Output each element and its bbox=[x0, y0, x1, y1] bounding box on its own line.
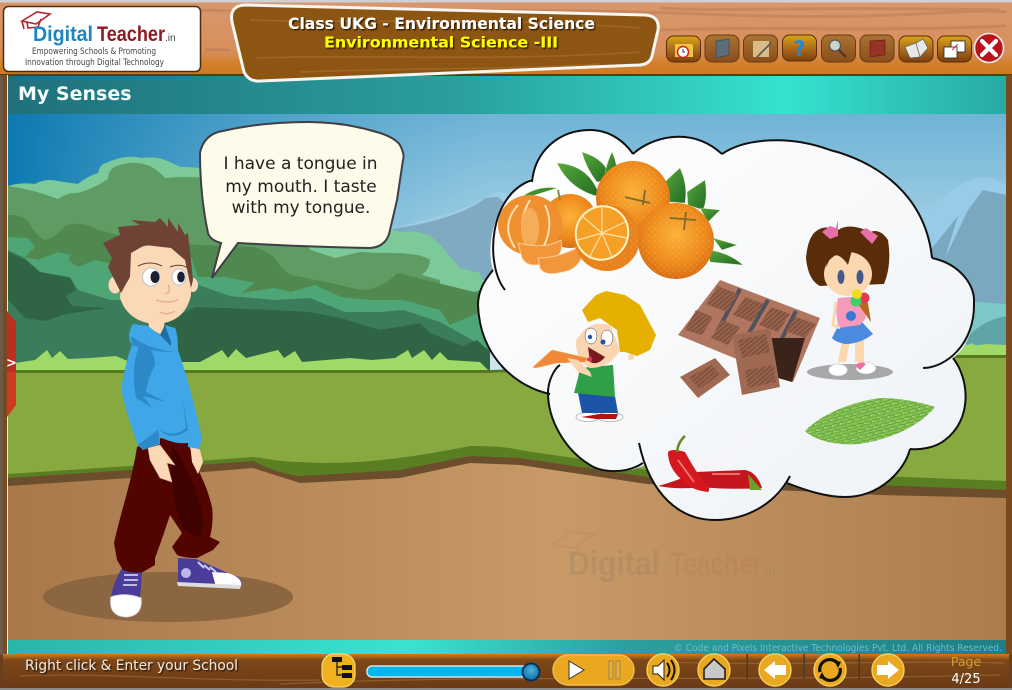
play and pause pill bbox=[553, 655, 634, 685]
legs bbox=[838, 340, 864, 362]
grass tufts left bbox=[8, 349, 490, 372]
icon: help bbox=[782, 35, 816, 61]
dark bush left bbox=[8, 252, 108, 321]
icon: help: ? bbox=[793, 37, 806, 61]
eyes and mouth bbox=[585, 328, 613, 363]
piece: small bbox=[680, 358, 730, 398]
icon: close bbox=[974, 34, 1004, 62]
hair bbox=[582, 291, 656, 356]
eyes bbox=[838, 270, 864, 284]
green field bbox=[8, 358, 1006, 490]
logo panel bbox=[4, 6, 200, 72]
side tab arrow: > bbox=[6, 356, 17, 371]
icon: open book bbox=[899, 36, 933, 62]
shadow bbox=[43, 572, 293, 622]
back shoe bbox=[177, 558, 241, 589]
nose and mouth bbox=[156, 285, 178, 314]
divider bbox=[858, 654, 860, 679]
progress slider bbox=[367, 664, 540, 680]
ice cream bbox=[850, 289, 871, 322]
boy eating pizza bbox=[533, 291, 656, 422]
cloud fill bbox=[478, 130, 974, 520]
broken dark edge bbox=[770, 338, 805, 382]
bottom control bar bbox=[0, 654, 1012, 690]
icon: search bbox=[822, 35, 856, 62]
oranges bbox=[498, 152, 743, 279]
button: replay bbox=[814, 654, 846, 686]
icon: dictionary bbox=[860, 35, 894, 62]
logo wordmark second part: Teacher bbox=[97, 23, 165, 46]
watermark: Teacher bbox=[670, 546, 762, 582]
school text: Right click & Enter your School bbox=[25, 658, 238, 674]
hair bbox=[103, 218, 193, 293]
orange: top bbox=[596, 161, 670, 235]
shirt bbox=[836, 296, 866, 328]
face bbox=[576, 324, 620, 368]
chilli: upright bbox=[668, 450, 709, 492]
grass strip right bbox=[955, 343, 1006, 356]
orange: peeled mandarin bbox=[498, 195, 562, 255]
orange: halved bbox=[565, 195, 640, 271]
arms bbox=[833, 302, 840, 328]
divider bbox=[746, 654, 748, 679]
dirt ground bbox=[8, 463, 1006, 641]
hoodie shading bbox=[131, 336, 188, 450]
page label: Page bbox=[951, 654, 981, 669]
back canopy bbox=[8, 163, 490, 372]
grass edge bbox=[8, 355, 1006, 373]
logo tagline 1: Empowering Schools & Promoting bbox=[32, 47, 156, 57]
hair back bbox=[806, 226, 889, 286]
trousers bbox=[114, 438, 220, 573]
illustrated scene bbox=[8, 114, 1006, 641]
page number: 4/25 bbox=[951, 672, 981, 687]
arm bbox=[567, 358, 592, 377]
toolbar icons bbox=[666, 34, 1004, 62]
red chillies bbox=[658, 436, 762, 492]
title line 2: Environmental Science -III bbox=[324, 34, 558, 52]
shadow bbox=[807, 364, 893, 380]
dark bush right bbox=[150, 307, 490, 372]
main slab bbox=[678, 280, 820, 382]
distant mountains bbox=[392, 177, 1006, 346]
orange: front bbox=[638, 203, 714, 279]
head bbox=[103, 218, 198, 324]
teal footer band bbox=[8, 640, 1006, 655]
bubble text line 3: with my tongue. bbox=[232, 198, 370, 218]
title line 1: Class UKG - Environmental Science bbox=[288, 14, 595, 33]
button: forward bbox=[872, 654, 904, 686]
face bbox=[824, 252, 872, 296]
shirt bbox=[574, 365, 615, 397]
icon: notepad bbox=[744, 35, 778, 62]
pizza bbox=[533, 350, 587, 368]
side tab bbox=[6, 311, 17, 417]
girl with ice cream bbox=[806, 220, 893, 380]
teal heading band bbox=[8, 76, 1006, 114]
hoodie bbox=[121, 324, 202, 450]
button: sound bbox=[647, 654, 679, 686]
chocolate bar bbox=[678, 280, 820, 398]
logo tagline 2: Innovation through Digital Technology bbox=[25, 58, 165, 68]
piece: stacked bbox=[732, 328, 780, 395]
logo: graduation cap bbox=[22, 12, 50, 29]
hands bbox=[148, 443, 203, 482]
logo suffix: .in bbox=[165, 33, 176, 44]
front shoe bbox=[110, 568, 142, 617]
jeans bbox=[578, 393, 618, 413]
slab grooves bbox=[718, 289, 796, 352]
orange: back mandarin bbox=[543, 194, 597, 248]
bubble text line 1: I have a tongue in bbox=[223, 154, 378, 174]
heading: My Senses: My Senses bbox=[18, 83, 132, 105]
watermark: .in bbox=[762, 564, 776, 579]
divider bbox=[804, 654, 805, 679]
boy character bbox=[43, 218, 293, 622]
slab wells bbox=[685, 286, 816, 345]
skirt bbox=[832, 322, 873, 344]
top wood bar bbox=[0, 0, 1012, 76]
chilli: flat bbox=[658, 470, 762, 489]
watermark bbox=[552, 532, 776, 583]
second canopy bbox=[8, 215, 490, 372]
shoes bbox=[576, 412, 623, 422]
button: back bbox=[759, 654, 791, 686]
eyes bbox=[138, 263, 188, 286]
speech bubble bbox=[200, 122, 404, 278]
shoes bbox=[828, 362, 876, 376]
icon: history folder bbox=[666, 36, 700, 62]
leaves bbox=[518, 152, 743, 265]
sky bbox=[8, 114, 1006, 374]
bitter gourd bbox=[805, 398, 935, 444]
neck bbox=[148, 318, 165, 336]
dark grass edge of path bbox=[8, 446, 1006, 495]
thought cloud bbox=[478, 130, 974, 520]
path brown edge bbox=[8, 456, 1006, 500]
orange: segments bbox=[518, 240, 582, 274]
icon: resize window bbox=[938, 36, 972, 62]
bubble text line 2: my mouth. I taste bbox=[225, 177, 377, 197]
cloud outline bbox=[478, 130, 974, 520]
icon: reference book bbox=[705, 35, 739, 62]
teal bush fringe bbox=[8, 237, 490, 372]
mint tree tops bbox=[8, 157, 490, 300]
button: home bbox=[698, 654, 730, 686]
bows bbox=[822, 220, 878, 244]
mid bush layer bbox=[8, 250, 490, 372]
sky left shade bbox=[8, 114, 488, 314]
course title plaque bbox=[232, 5, 658, 81]
button: content tree bbox=[322, 654, 355, 687]
watermark: Digital bbox=[568, 545, 660, 583]
logo wordmark: Digital bbox=[33, 23, 93, 46]
